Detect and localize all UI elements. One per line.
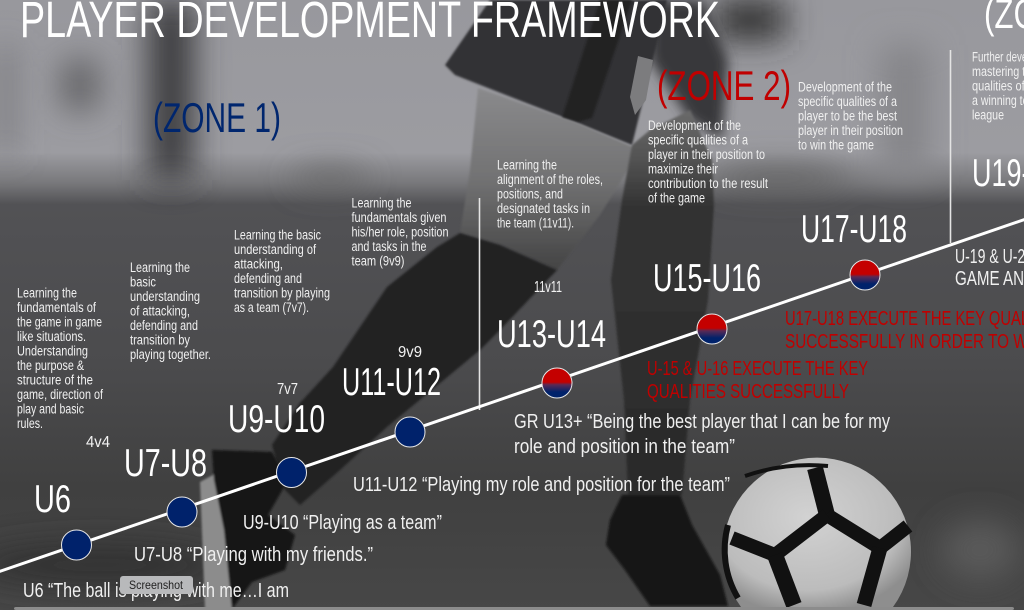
- age group labels: U11-U12: [342, 361, 441, 404]
- age group labels: U15-U16: [653, 257, 761, 300]
- description: U15-U16: specific qualities of a: [648, 132, 748, 148]
- description: U6: the game in game: [17, 314, 102, 330]
- zone 1 heading: (ZONE 1): [153, 94, 281, 141]
- description: U6: the purpose &: [17, 358, 84, 373]
- description: U13-U14: designated tasks in: [497, 201, 590, 216]
- game format labels: 9v9: [398, 344, 422, 361]
- description: U6: game, direction of: [17, 387, 103, 402]
- milestone: U11-U12 marker: [395, 417, 425, 447]
- red callout: U15-U16: [647, 358, 868, 403]
- description: U17-U18: player in their position: [798, 123, 903, 138]
- milestone: U9-U10 marker: [276, 458, 306, 488]
- description: U6: [17, 286, 103, 431]
- description: U7-U8: Learning the: [130, 260, 190, 275]
- age group labels: U6: [34, 478, 71, 521]
- photo: kicking leg sock: [272, 233, 557, 505]
- age group labels: [34, 152, 1024, 521]
- description: U19-U20, cut off at the edge: [972, 50, 1024, 122]
- photo: crest on shorts: [630, 56, 653, 115]
- player mindset quotes: U9-U10 “Playing as a team”: [243, 512, 442, 534]
- photo: dark stripe on shorts: [562, 0, 632, 122]
- description: U11-U12: and tasks in the: [352, 239, 426, 254]
- description: U9-U10: Learning the basic: [234, 228, 321, 242]
- description: U9-U10: [234, 228, 330, 315]
- description: U11-U12: Learning the: [352, 196, 412, 210]
- zone 2 heading: (ZONE 2): [657, 62, 791, 109]
- milestone: U6 marker: [62, 530, 92, 560]
- age group labels: U7-U8: [124, 442, 207, 485]
- game format labels: 4v4: [86, 434, 110, 451]
- description: U17-U18: to win the game: [798, 138, 874, 152]
- description: U7-U8: defending and: [130, 318, 198, 333]
- red callout: U15-U16: U-15 & U-16 EXECUTE THE KEY: [647, 358, 868, 380]
- description: U13-U14: the team (11v11).: [497, 216, 574, 230]
- description: U9-U10: as a team (7v7).: [234, 300, 309, 315]
- age group labels: U13-U14: [497, 313, 606, 356]
- game format labels: 11v11: [534, 279, 562, 296]
- description: U11-U12: his/her role, position: [352, 224, 448, 240]
- screenshot tooltip: [120, 576, 193, 594]
- photo: standing boot: [606, 495, 728, 606]
- player mindset quotes: U6 “The ball is playing with me…I am: [23, 580, 289, 602]
- description: U6: structure of the: [17, 372, 93, 388]
- description: U17-U18: player to be the best: [798, 108, 897, 124]
- description: U6: Learning the: [17, 286, 77, 300]
- player mindset quotes: role and position in the team”: [514, 436, 735, 458]
- description: U17-U18: [798, 80, 903, 152]
- description: U6: like situations.: [17, 329, 86, 344]
- description: U7-U8: of attacking,: [130, 304, 190, 318]
- description: U15-U16: Development of the: [648, 118, 741, 133]
- description: U7-U8: [130, 260, 211, 362]
- description: U19-U20, cut off at the edge: league: [972, 108, 1004, 122]
- description: U11-U12: [352, 196, 448, 268]
- red callout: U17-U18, cut off at the edge: [785, 308, 1024, 353]
- description: U15-U16: of the game: [648, 190, 705, 206]
- age group labels: U9-U10: [228, 398, 325, 441]
- milestone: U13-U14 marker: [542, 368, 572, 398]
- description: U9-U10: understanding of: [234, 242, 316, 257]
- description: U7-U8: playing together.: [130, 347, 211, 362]
- description: U13-U14: positions, and: [497, 186, 563, 202]
- description: U6: rules.: [17, 416, 43, 431]
- description: U17-U18: Development of the: [798, 80, 892, 94]
- description: U7-U8: transition by: [130, 332, 190, 348]
- description: U7-U8: basic: [130, 274, 156, 290]
- photo: thigh: [460, 88, 640, 270]
- description: U11-U12: team (9v9): [352, 254, 404, 268]
- photo: blurred hip behind zone 2 heading: [650, 0, 728, 140]
- description: U9-U10: attacking,: [234, 256, 283, 272]
- description: U17-U18: specific qualities of a: [798, 94, 897, 109]
- milestone: U7-U8 marker: [167, 497, 197, 527]
- game format labels: [86, 279, 562, 451]
- timeline dividers: [480, 50, 950, 410]
- description: U9-U10: defending and: [234, 271, 302, 286]
- red callout: U15-U16: QUALITIES SUCCESSFULLY: [647, 381, 849, 403]
- bottom window bar: [14, 607, 1014, 610]
- description: U7-U8: understanding: [130, 289, 200, 304]
- description: U15-U16: maximize their: [648, 162, 718, 176]
- description: U6: fundamentals of: [17, 300, 96, 315]
- photo: player's shorts: [445, 0, 667, 145]
- description: U13-U14: [497, 158, 603, 230]
- description: U15-U16: contribution to the result: [648, 176, 768, 191]
- description: U13-U14: Learning the: [497, 158, 557, 172]
- diagonal timeline: [0, 219, 1024, 572]
- player mindset quotes: [23, 246, 1024, 602]
- description: U11-U12: fundamentals given: [352, 210, 446, 225]
- milestone: U17-U18 marker: [850, 260, 880, 290]
- screenshot tooltip: Screenshot: [129, 578, 184, 592]
- description: U9-U10: transition by playing: [234, 286, 330, 300]
- player mindset quotes: GR U13+ “Being the best player that I can be for my: [514, 411, 890, 433]
- player mindset quotes: U7-U8 “Playing with my friends.”: [134, 544, 373, 566]
- description: U13-U14: alignment of the roles,: [497, 172, 603, 187]
- description: U15-U16: [648, 118, 768, 206]
- description: U6: Understanding: [17, 344, 88, 358]
- photo: kicking boot: [200, 450, 295, 609]
- description: U6: play and basic: [17, 402, 84, 416]
- game format labels: 7v7: [277, 381, 298, 398]
- photo: standing leg and sock: [611, 110, 714, 495]
- player mindset quotes: U11-U12 “Playing my role and position for the team”: [353, 474, 730, 496]
- photo: soccer ball: [723, 458, 911, 607]
- milestone: U15-U16 marker: [697, 314, 727, 344]
- age group labels: U17-U18: [801, 208, 907, 251]
- description: U15-U16: player in their position to: [648, 147, 765, 162]
